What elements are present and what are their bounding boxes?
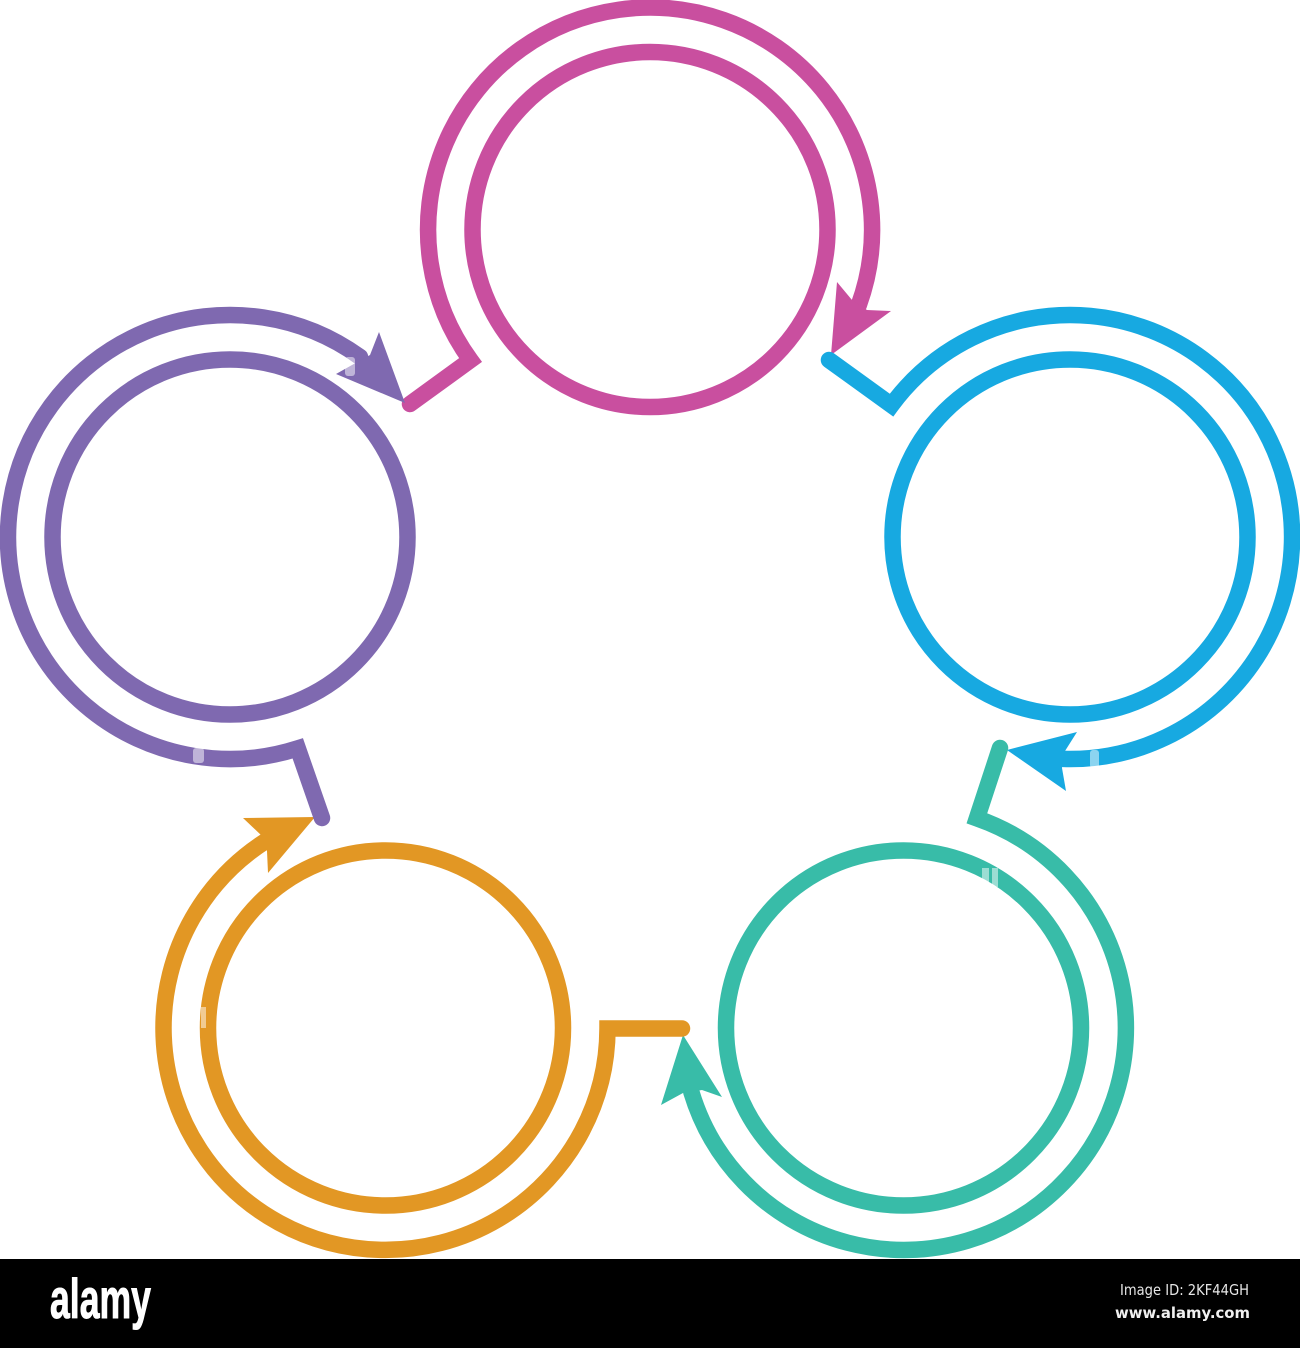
step 4: bottom-left orange circle with arrow [164, 817, 682, 1250]
footer band [0, 1259, 1300, 1348]
footer url: www.alamy.com [1115, 1304, 1250, 1322]
step 1: top pink circle with arrow [410, 8, 891, 407]
step 2: right blue circle with arrow [829, 315, 1292, 791]
faint watermark fragments over the rings [193, 357, 1099, 1028]
footer image id: Image ID: 2KF44GH [1120, 1281, 1249, 1299]
step 3: bottom-right teal circle with arrow [661, 748, 1126, 1250]
step 5: left purple circle with arrow [8, 315, 408, 818]
footer logo: alamy: alamy [50, 1267, 151, 1330]
